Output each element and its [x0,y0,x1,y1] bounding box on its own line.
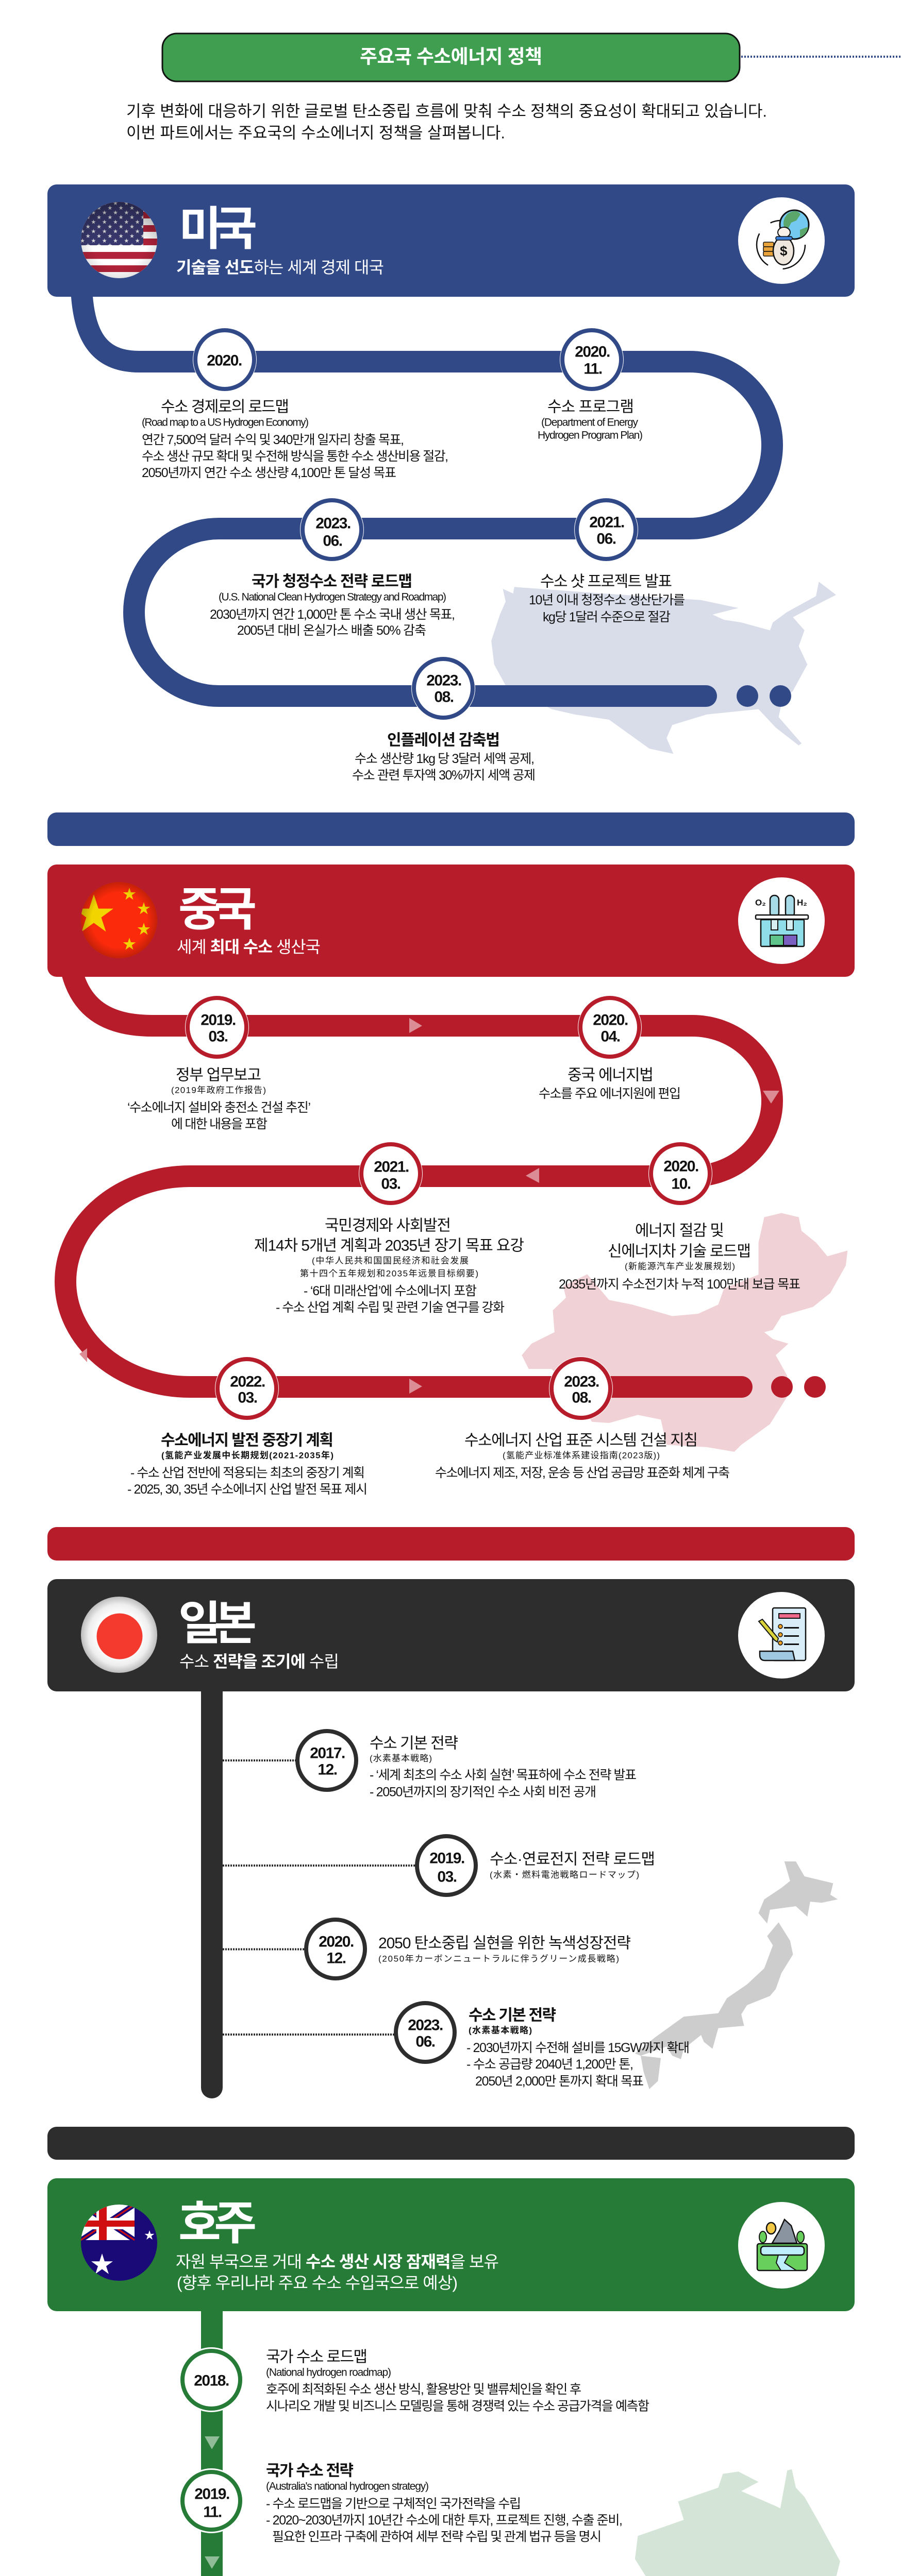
event: 수소·연료전지 전략 로드맵: (水素・燃料電池戦略ロードマップ) [490,1870,639,1879]
event: 수소 경제로의 로드맵: 수소 경제로의 로드맵 [161,399,289,415]
node: 2022.03: 2022. [230,1374,265,1390]
event: 수소 경제로의 로드맵 [142,399,448,480]
flag: Japan [81,1597,157,1673]
node: 2018: 2018. [194,2372,229,2389]
event: 국민경제와 사회발전: (中华人民共和国国民经济和社会发展 [312,1256,469,1265]
heading: 중국: 중국 [178,884,257,936]
map: Japan [635,1861,838,2089]
event: 수소 기본 전략 2023: 수소 기본 전략 [469,2007,556,2024]
node: 2017.12: 2017. [310,1744,345,1762]
event: 국가 수소 로드맵: 시나리오 개발 및 비즈니스 모델링을 통해 경쟁력 있는 수소 공급가격을 예측함 [266,2399,649,2413]
event: 수소 기본 전략 2023: (水素基本戦略) [469,2025,532,2035]
node: 2018 [179,2347,244,2412]
event: 수소에너지 발전 중장기 계획: - 수소 산업 전반에 적용되는 최초의 중장기 계획 [130,1466,365,1480]
panel: 일본 [47,1579,855,2160]
panel: 미국 [47,184,855,846]
arrows on path [79,1018,779,1394]
event: 국민경제와 사회발전: - 수소 산업 계획 수립 및 관련 기술 연구를 강화 [276,1300,505,1315]
node: 2021.06: 2021. [589,514,624,531]
footer band [47,1527,855,1561]
event: 인플레이션 감축법 [352,732,536,783]
event: 에너지 절감 및 신에너지차 기술 로드맵 [559,1222,800,1292]
node: 2021.06 [574,498,638,562]
event: 수소 경제로의 로드맵: 2050년까지 연간 수소 생산량 4,100만 톤 달성 목표 [142,466,396,480]
timeline line [201,2303,223,2576]
heading: 미국 [176,204,384,277]
icon: globe and money bag [738,197,825,284]
node: 2022.03: 03. [238,1389,257,1406]
heading: 호주: 호주 [178,2198,257,2249]
header band [47,865,855,977]
event: 수소 프로그램: Hydrogen Program Plan) [538,430,643,441]
node: 2017.12 [297,1731,356,1790]
event: 국가 청정수소 전략 로드맵: 국가 청정수소 전략 로드맵 [252,573,412,590]
heading: 호주 [176,2198,499,2292]
flag: China [74,882,157,958]
node: 2023.06: 06. [415,2033,435,2050]
event: 수소에너지 발전 중장기 계획 [127,1432,368,1497]
event: 녹색성장전략: (2050年カーボンニュートラルに伴うグリーン成長戦略) [378,1954,619,1964]
node: 2020.11 [560,328,624,392]
node: 2020.10 [648,1142,712,1206]
node: 2023.08: 08. [434,688,454,706]
header band [47,184,855,297]
node: 2020.11: 2020. [575,343,610,361]
node: 2020.12 [306,1920,365,1978]
event: 수소에너지 발전 중장기 계획: 수소에너지 발전 중장기 계획 [161,1432,333,1449]
heading: 일본: 일본 [178,1598,257,1650]
intro text [126,102,767,142]
title [162,33,740,81]
node: 2021.03: 2021. [374,1158,409,1176]
node: 2021.06: 06. [596,531,616,547]
node: 2020.04: 2020. [593,1012,628,1028]
node: 2020.11: 11. [583,361,602,377]
event: 국가 청정수소 전략 로드맵: 2030년까지 연간 1,000만 톤 수소 국내 생산 목표, [210,607,455,622]
flag: USA [81,202,157,278]
heading: 미국: 기술을 선도하는 세계 경제 대국 [176,258,384,277]
node: 2019.11: 11. [203,2504,222,2520]
event: 에너지 절감 및 신에너지차 기술 로드맵: (新能源汽车产业发展规划) [625,1261,735,1272]
event: 국가 청정수소 전략 로드맵: (U.S. National Clean Hydrogen Strategy and Roadmap) [219,591,446,603]
node: 2022.03 [215,1357,279,1420]
heading: 호주: (향후 우리나라 주요 수소 수입국으로 예상) [177,2274,458,2292]
event: 국가 수소 전략: 국가 수소 전략 [266,2463,354,2479]
event: 에너지 절감 및 신에너지차 기술 로드맵: 2035년까지 수소전기차 누적 100만대 보급 목표 [559,1277,800,1292]
event: 수소 기본 전략 2017: 수소 기본 전략 [370,1735,458,1752]
header band [47,1579,855,1691]
map: Australia [635,2469,840,2576]
heading: 호주: 자원 부국으로 거대 수소 생산 시장 잠재력을 보유 [176,2252,499,2271]
node: 2020.10: 10. [671,1176,691,1192]
icon: checklist document [738,1592,825,1679]
event: 국가 수소 전략: (Australia's national hydrogen strategy) [266,2480,429,2493]
panel: 중국 [47,865,855,1561]
node: 2020.12: 2020. [319,1933,354,1951]
node: 2019.03: 03. [208,1028,228,1045]
node: 2023.08: 08. [572,1389,591,1406]
event: 국민경제와 사회발전 [254,1217,524,1315]
icon: globe and money bag: $ [780,243,788,259]
event: 수소 기본 전략 2023: - 수소 공급량 2040년 1,200만 톤, [466,2057,633,2072]
map: USA [491,582,836,754]
event: 수소·연료전지 전략 로드맵 [490,1851,655,1879]
node: 2020.12: 12. [326,1950,346,1967]
event: 국가 수소 전략: 필요한 인프라 구축에 관하여 세부 전략 수립 및 관계 법규 등을 명시 [272,2530,602,2544]
map: China [522,1213,847,1452]
node: 2019.03: 03. [437,1868,457,1886]
event: 녹색성장전략 [378,1935,631,1964]
node: 2020.04: 04. [600,1028,620,1045]
node: 2019.03 [417,1836,476,1895]
event: 국가 수소 전략 [266,2463,623,2544]
event: 수소 기본 전략 2017: (水素基本戦略) [370,1754,432,1763]
event: 수소에너지 산업 표준 시스템 건설 지침: (氢能产业标准体系建设指南(2023版)) [503,1451,660,1460]
event: 수소 기본 전략 2017: - ‘세계 최초의 수소 사회 실현’ 목표하에 수소 전략 발표 [370,1768,637,1783]
event: 국가 청정수소 전략 로드맵 [210,573,455,638]
event: 에너지 절감 및 신에너지차 기술 로드맵: 신에너지차 기술 로드맵 [608,1243,751,1260]
intro text: 이번 파트에서는 주요국의 수소에너지 정책을 살펴봅니다. [126,124,505,142]
event: 중국 에너지법 [539,1066,681,1101]
event: 정부 업무보고: 정부 업무보고 [176,1066,261,1084]
event: 정부 업무보고 [127,1066,311,1131]
node: 2023.08: 2023. [426,672,461,689]
event: 수소 샷 프로젝트 발표 [529,573,685,624]
event: 수소 프로그램: (Department of Energy [541,416,638,429]
panel: 호주 [47,2178,855,2576]
event: 수소에너지 산업 표준 시스템 건설 지침: 수소에너지 산업 표준 시스템 건설 지침 [464,1432,698,1449]
header band [47,2178,855,2311]
event: 수소 기본 전략 2023 [466,2007,690,2089]
event: 국민경제와 사회발전: 국민경제와 사회발전 [325,1217,451,1234]
event: 인플레이션 감축법: 인플레이션 감축법 [387,732,500,749]
icon: electrolysis tank: H₂ [797,897,807,908]
node: 2020 [193,328,257,392]
event: 정부 업무보고: 에 대한 내용을 포함 [171,1117,268,1131]
event: 국가 수소 전략: - 수소 로드맵을 기반으로 구체적인 국가전략을 수립 [266,2497,521,2511]
title: 주요국 수소에너지 정책 [360,46,542,67]
node: 2017.12: 12. [318,1761,337,1778]
event: 수소에너지 발전 중장기 계획: - 2025, 30, 35년 수소에너지 산업 발전 목표 제시 [127,1482,368,1497]
event: 녹색성장전략: 2050 탄소중립 실현을 위한 녹색성장전략 [378,1935,631,1952]
event: 수소 경제로의 로드맵: 수소 생산 규모 확대 및 수전해 방식을 통한 수소 생산비용 절감, [142,449,448,464]
heading: 중국 [177,884,321,956]
icon: electrolysis tank [738,877,825,964]
node: 2023.06 [396,2003,455,2062]
event: 수소 기본 전략 2017: - 2050년까지의 장기적인 수소 사회 비전 공개 [370,1785,596,1799]
event: 국가 수소 로드맵 [266,2348,649,2413]
event: 국가 수소 로드맵: 호주에 최적화된 수소 생산 방식, 활용방안 및 밸류체인을 확인 후 [266,2382,581,2397]
node: 2023.06: 2023. [408,2016,443,2034]
timeline path [81,289,791,707]
event: 국가 수소 로드맵: 국가 수소 로드맵 [266,2348,368,2366]
event: 수소 기본 전략 2023: 2050년 2,000만 톤까지 확대 목표 [475,2074,644,2089]
timeline line [201,1685,223,2088]
event: 국민경제와 사회발전: - ‘6대 미래산업’에 수소에너지 포함 [304,1284,477,1298]
node: 2021.03: 03. [381,1176,401,1192]
heading: 중국: 세계 최대 수소 생산국 [177,938,321,956]
event: 국가 수소 전략: - 2020~2030년까지 10년간 수소에 대한 투자, 프로젝트 진행, 수출 준비, [266,2513,623,2528]
arrows on line [205,2436,220,2569]
icon: electrolysis tank: O₂ [755,897,766,908]
node: 2019.11: 2019. [194,2485,229,2503]
intro text: 기후 변화에 대응하기 위한 글로벌 탄소중립 흐름에 맞춰 수소 정책의 중요성이 확대되고 있습니다. [126,102,767,121]
dotted connectors [223,1760,415,2035]
event: 수소에너지 산업 표준 시스템 건설 지침 [435,1432,730,1480]
event: 인플레이션 감축법: 수소 생산량 1kg 당 3달러 세액 공제, [355,752,535,766]
event: 수소 샷 프로젝트 발표: 10년 이내 청정수소 생산단가를 [529,593,685,607]
event: 수소에너지 발전 중장기 계획: (氢能产业发展中长期规划(2021-2035年) [161,1450,333,1460]
event: 에너지 절감 및 신에너지차 기술 로드맵: 에너지 절감 및 [635,1222,724,1240]
heading: 일본 [178,1598,339,1671]
event: 수소에너지 산업 표준 시스템 건설 지침: 수소에너지 제조, 저장, 운송 등 산업 공급망 표준화 체계 구축 [435,1466,730,1480]
node: 2019.03: 2019. [201,1012,236,1028]
event: 정부 업무보고: (2019年政府工作报告) [171,1085,266,1095]
event: 정부 업무보고: ‘수소에너지 설비와 충전소 건설 추진’ [127,1100,311,1115]
footer band [47,812,855,846]
event: 국민경제와 사회발전: 제14차 5개년 계획과 2035년 장기 목표 요강 [254,1238,524,1254]
event: 수소 경제로의 로드맵: 연간 7,500억 달러 수익 및 340만개 일자리 창출 목표, [142,433,404,447]
event: 국민경제와 사회발전: 第十四个五年规划和2035年远景目标纲要) [300,1268,478,1279]
event: 국가 청정수소 전략 로드맵: 2005년 대비 온실가스 배출 50% 감축 [237,623,426,638]
node: 2019.03: 2019. [429,1850,464,1867]
event: 수소 샷 프로젝트 발표: 수소 샷 프로젝트 발표 [540,573,672,590]
timeline path [65,969,826,1398]
node: 2023.08 [411,656,475,720]
flag: Australia [81,2205,157,2281]
event: 인플레이션 감축법: 수소 관련 투자액 30%까지 세액 공제 [352,768,536,783]
node: 2023.06: 06. [323,533,342,549]
event: 수소 샷 프로젝트 발표: kg당 1달러 수준으로 절감 [543,610,671,624]
node: 2023.08: 2023. [564,1374,599,1390]
node: 2023.08 [549,1357,613,1420]
event: 국가 수소 로드맵: (National hydrogen roadmap) [266,2367,391,2378]
node: 2019.11 [179,2468,244,2533]
node: 2021.03 [359,1142,423,1206]
node: 2020: 2020. [207,352,242,369]
node: 2019.03 [185,995,249,1059]
icon: mountain and water [738,2202,825,2289]
event: 수소 프로그램 [538,399,643,441]
node: 2023.06 [300,498,364,562]
event: 중국 에너지법: 중국 에너지법 [568,1066,654,1084]
event: 중국 에너지법: 수소를 주요 에너지원에 편입 [539,1087,681,1101]
node: 2023.06: 2023. [315,515,351,532]
event: 수소·연료전지 전략 로드맵: 수소·연료전지 전략 로드맵 [490,1851,655,1868]
node: 2020.10: 2020. [663,1158,698,1175]
heading: 일본: 수소 전략을 조기에 수립 [179,1652,339,1671]
event: 수소 기본 전략 2017 [370,1735,637,1799]
event: 수소 기본 전략 2023: - 2030년까지 수전해 설비를 15GW까지 확대 [466,2041,690,2055]
event: 수소 프로그램: 수소 프로그램 [547,399,634,415]
event: 수소 경제로의 로드맵: (Road map to a US Hydrogen Economy) [142,416,309,429]
footer band [47,2127,855,2160]
heading: 미국: 미국 [179,204,257,255]
node: 2020.04 [578,995,642,1059]
